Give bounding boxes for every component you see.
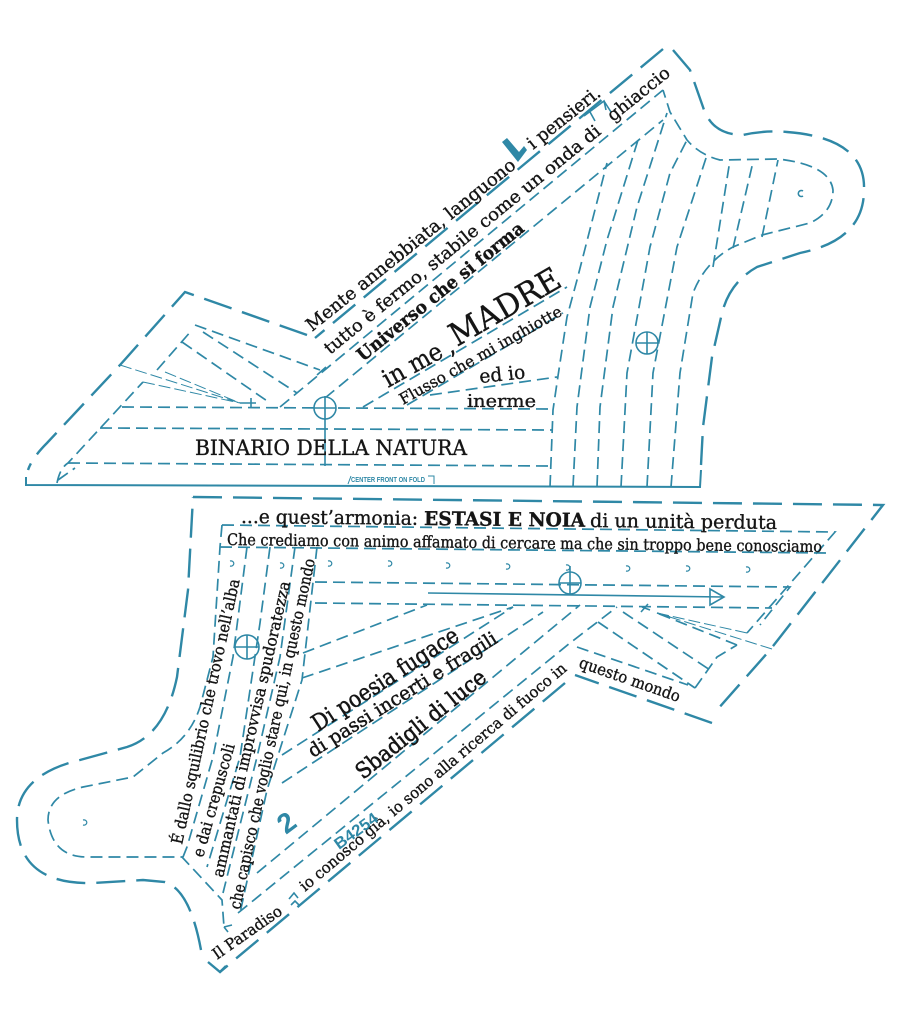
text: Flusso che mi inghiotte: Flusso che mi inghiotte [396,302,565,408]
upper piece cutting outline [26,49,864,487]
icon: notch marks top [240,101,611,408]
text: di un unità perduta: di un unità perduta [590,510,777,534]
text: vertical line 4: che capisco che voglio stare qui, in questo mondo [225,557,319,911]
icon: target circle right [636,332,658,354]
text: comma: , [439,332,460,360]
text: inerme: inerme [467,391,536,412]
icon: pattern holes [83,561,750,825]
text: Di poesia fugace: Di poesia fugace [307,623,464,737]
label: piece number 2: 2 [271,806,302,840]
icon: target circle grainline [559,566,581,594]
icon: target circle vertical [235,635,259,659]
text: Il Paradiso: Il Paradiso [209,902,286,963]
lower piece cutting outline [17,497,883,972]
text: MADRE: MADRE [442,260,568,354]
text: ghiaccio: ghiaccio [604,63,675,126]
text: Che crediamo: Che crediamo con animo affamato di cercare ma che sin troppo bene conosciamo [227,530,822,556]
text: ed io: ed io [478,361,526,388]
icon: target circle left [314,396,336,420]
icon: pattern hole [798,190,803,196]
text: in me: in me [377,336,448,393]
icon: notch marks lower [224,604,670,932]
panel: lower pattern piece [17,497,883,972]
text: vertical line 3: ammantati di improvvisa spudoratezza [208,579,294,879]
panel: upper pattern piece [26,49,864,487]
text: Sbadigli di luce: Sbadigli di luce [351,665,492,785]
text: questo mondo: questo mondo [577,653,683,706]
text: di passi incerti e fragili: di passi incerti e fragili [304,628,501,762]
label: B4254: B4254 [331,810,382,853]
text: BINARIO DELLA NATURA: BINARIO DELLA NATURA [195,436,468,460]
text: vertical line 1: É dallo squilibrio che trovo nell’alba [166,576,244,846]
text: Universo che si forma: Universo che si forma [353,218,529,366]
text: armonia lead: ...e quest’armonia: [241,506,418,530]
text: line 2: tutto è fermo, stabile come un onda di [321,121,605,359]
piece number 1 [502,138,527,162]
text: vertical line 2: e dai crepuscoli [189,741,239,859]
text: i pensieri: i pensieri. [523,83,605,154]
label: center front on fold: CENTER FRONT ON FOLD [351,477,425,484]
text: io conosco già: io conosco già, io sono alla ricerca di fuoco in [296,659,570,895]
lower piece seam lines [48,525,835,927]
upper piece seam lines [57,90,833,487]
arrow: grainline [428,589,724,605]
text: ESTASI E NOIA: ESTASI E NOIA [424,508,585,532]
text: line 1: Mente annebbiata, languono [302,155,520,336]
